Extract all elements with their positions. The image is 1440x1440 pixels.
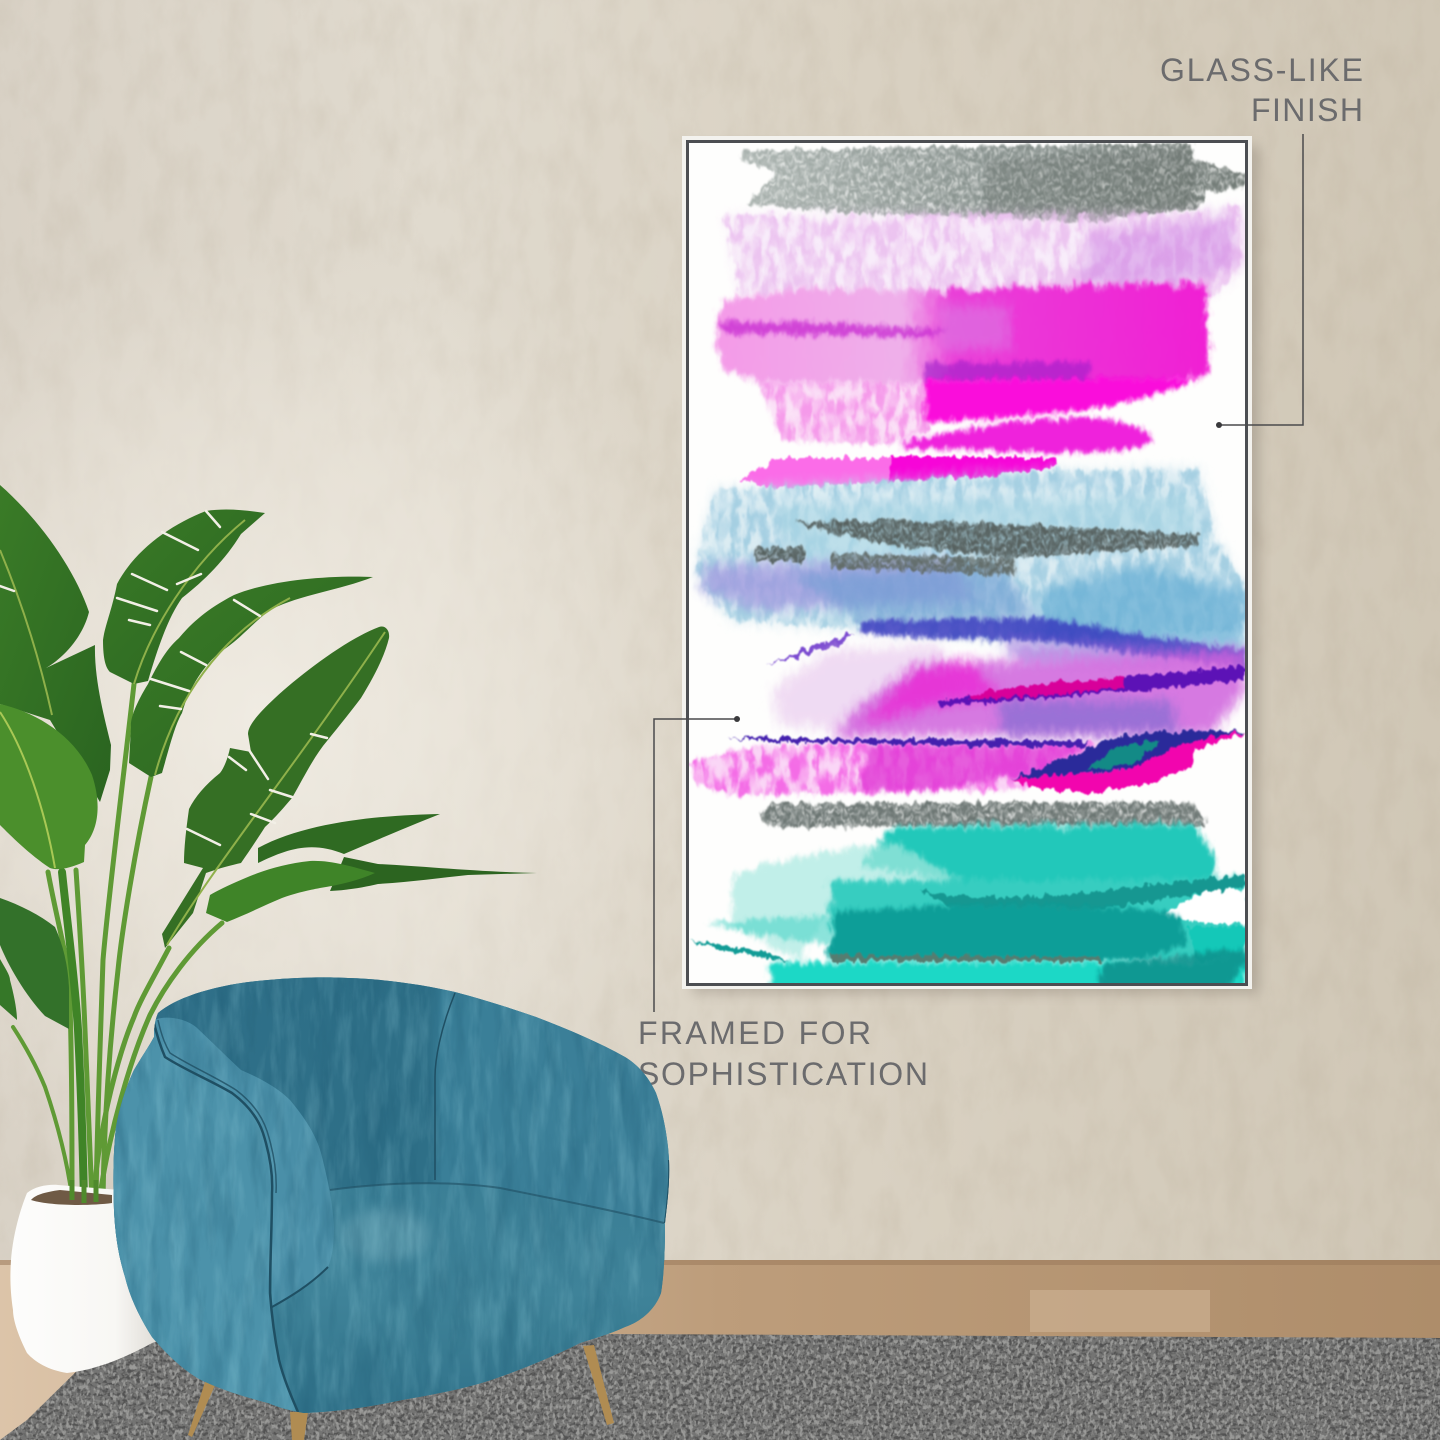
lilac wash and lower magenta bbox=[772, 645, 960, 730]
deep blue and violet bands bbox=[860, 618, 1245, 668]
leaf: long upper right bbox=[129, 577, 373, 777]
plant bbox=[0, 485, 537, 1202]
leaf: large diagonal bbox=[162, 627, 389, 948]
canvas bbox=[689, 143, 1245, 983]
wooden floor bbox=[0, 1260, 1440, 1440]
chair seat bbox=[271, 1184, 665, 1413]
lower grey stroke bbox=[758, 802, 1205, 827]
leaf: long thin tip bbox=[330, 857, 537, 891]
leaf: top left large bbox=[0, 485, 111, 802]
stems bbox=[13, 684, 222, 1202]
teal washes bbox=[730, 824, 1246, 960]
framed painting bbox=[682, 136, 1260, 994]
leaf: lower left bbox=[0, 898, 69, 1029]
grey top strokes bbox=[740, 143, 1246, 222]
chair inner arm bbox=[154, 1018, 334, 1307]
callout: glass-like finish bbox=[1160, 52, 1363, 428]
dark inner edge bbox=[686, 140, 1248, 986]
purple wisp bbox=[769, 634, 854, 665]
leaf tears bbox=[0, 511, 327, 845]
callout: glass-like finish: FINISH bbox=[1251, 92, 1363, 128]
magenta band bbox=[715, 283, 1210, 385]
pale blue wash bbox=[695, 470, 1245, 640]
white pot bbox=[10, 1180, 160, 1373]
callout: framed for sophistication: FRAMED FOR bbox=[638, 1015, 871, 1051]
leaf: top middle bbox=[103, 510, 265, 684]
leaf: bright front bbox=[0, 704, 98, 869]
chair outer arm bbox=[113, 1028, 296, 1412]
pale lilac wash bbox=[725, 205, 1245, 300]
leaf: lower front bbox=[206, 861, 375, 922]
leaf: far left small bbox=[0, 959, 17, 1020]
abstract brush strokes bbox=[689, 143, 1246, 990]
chair back bbox=[113, 977, 670, 1260]
leaf: upper thin spreading bbox=[258, 814, 440, 863]
lower magenta strokes bbox=[691, 742, 1100, 795]
magenta slivers bbox=[902, 418, 1153, 453]
pot stems over soil bbox=[72, 1180, 96, 1203]
callout: glass-like finish: GLASS-LIKE bbox=[1160, 52, 1363, 88]
callout: framed for sophistication bbox=[638, 716, 928, 1092]
chair legs bbox=[188, 1345, 614, 1440]
teal and crimson accent bbox=[1013, 732, 1246, 793]
callout: framed for sophistication: SOPHISTICATION bbox=[638, 1056, 928, 1092]
frame shadow bbox=[692, 146, 1260, 994]
grey midline strokes bbox=[755, 520, 1200, 575]
velvet texture bbox=[114, 978, 668, 1412]
armchair bbox=[113, 977, 670, 1440]
chair seams bbox=[154, 993, 669, 1412]
white outer frame bbox=[682, 136, 1252, 989]
chair body bbox=[113, 977, 670, 1413]
chair base fill bbox=[113, 977, 670, 1413]
grey rug bbox=[0, 1330, 1440, 1440]
